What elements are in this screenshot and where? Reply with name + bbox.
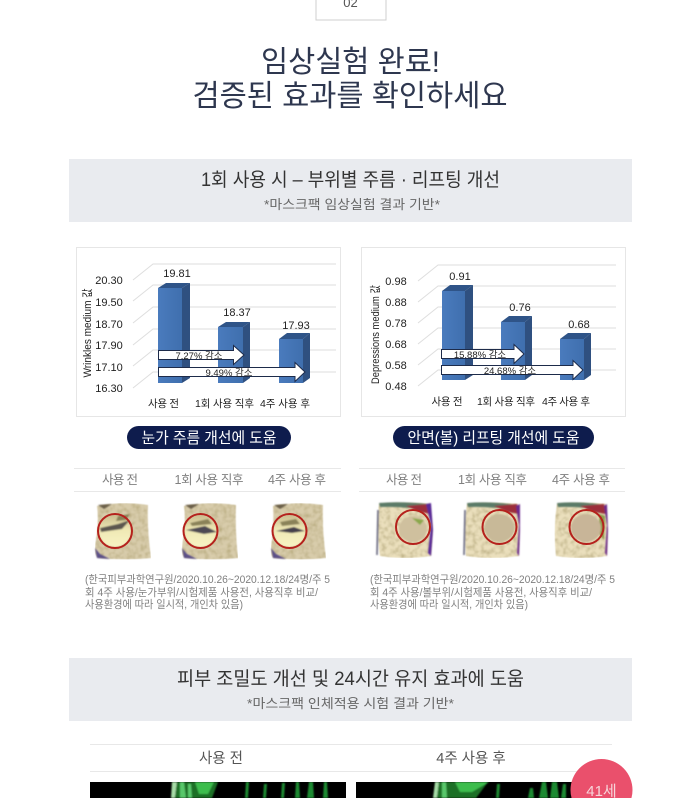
photo comparison: cheek: 1회 사용 직후 xyxy=(458,473,527,487)
comparison header xyxy=(90,744,612,772)
photo comparison: cheek: 4주 사용 후 xyxy=(552,473,610,487)
bar chart: depressions: 사용 전 xyxy=(432,396,462,408)
bar chart: wrinkles: Wrinkles medium 값 xyxy=(81,288,94,378)
panel: skin density heading band: 피부 조밀도 개선 및 24시간 유지 효과에 도움 xyxy=(177,668,524,690)
arrow: 7.27% decrease: 7.27% 감소 xyxy=(175,350,223,362)
bar chart: depressions: 0.76 xyxy=(509,302,531,314)
study note: under-eye: 사용환경에 따라 일시적, 개인차 있음) xyxy=(85,597,243,611)
study note: cheek: 회 4주 사용/볼부위/시험제품 사용전, 사용직후 비교/ xyxy=(370,586,592,599)
photo: cheek after one use xyxy=(464,502,520,558)
photo comparison: under-eye: 4주 사용 후 xyxy=(268,473,326,487)
bar chart: depressions: 4주 사용 후 xyxy=(542,396,590,408)
pill label: under-eye wrinkles: 눈가 주름 개선에 도움 xyxy=(142,429,276,447)
arrow: 24.68% decrease xyxy=(442,360,583,380)
arrow: 15.88% decrease xyxy=(442,344,524,364)
arrow: 9.49% decrease xyxy=(158,362,305,382)
bar chart: depressions: 0.91 xyxy=(449,271,471,283)
bar chart: wrinkles: 18.70 xyxy=(95,319,123,331)
bar chart: wrinkles: 19.81 xyxy=(163,268,191,280)
bar chart: wrinkles xyxy=(76,248,340,416)
pill label: cheek lifting: 안면(볼) 리프팅 개선에 도움 xyxy=(408,429,580,447)
panel: wrinkle and lifting heading band: *마스크팩 임상실험 결과 기반* xyxy=(264,197,440,212)
bar chart: wrinkles: 17.10 xyxy=(95,362,123,374)
study note: under-eye: 회 4주 사용/눈가부위/시험제품 사용전, 사용직후 비교/ xyxy=(85,586,318,599)
bar chart: wrinkles: 1회 사용 직후 xyxy=(195,398,254,410)
bar chart: wrinkles: 16.30 xyxy=(95,383,123,395)
section number badge xyxy=(316,0,386,20)
bar chart: wrinkles: 20.30 xyxy=(95,275,123,287)
panel: wrinkle and lifting heading band: 1회 사용 시 – 부위별 주름 · 리프팅 개선 xyxy=(201,169,500,191)
photo comparison: under-eye: 1회 사용 직후 xyxy=(174,473,244,487)
study note: under-eye xyxy=(85,573,330,611)
panel: skin density heading band xyxy=(69,658,632,721)
bar chart: wrinkles: 사용 전 xyxy=(148,398,179,410)
photo: under-eye after one use xyxy=(182,503,238,560)
bar chart: wrinkles: 18.37 xyxy=(223,307,251,319)
bar chart: wrinkles: 17.90 xyxy=(95,340,123,352)
photo: cheek before xyxy=(377,502,433,558)
bar chart: wrinkles: 17.93 xyxy=(282,320,310,332)
photo comparison: under-eye: 사용 전 xyxy=(102,473,138,487)
comparison header: 4주 사용 후 xyxy=(436,750,506,767)
bar chart: depressions: Depressions medium 값 xyxy=(369,285,382,384)
scan image: after xyxy=(356,782,572,798)
study note: cheek: 사용환경에 따라 일시적, 개인차 있음) xyxy=(370,597,528,611)
panel: skin density heading band: *마스크팩 인체적용 시험 결과 기반* xyxy=(247,696,454,711)
comparison header: 사용 전 xyxy=(199,750,243,767)
arrow: 7.27% decrease xyxy=(158,346,244,364)
study note: under-eye: (한국피부과학연구원/2020.10.26~2020.12.18/24명/주 5 xyxy=(85,573,330,586)
photo: under-eye after four weeks xyxy=(271,503,326,560)
bar chart: depressions: 1회 사용 직후 xyxy=(477,396,535,408)
photo comparison: cheek: 사용 전 xyxy=(386,473,422,487)
bar chart: wrinkles: 19.50 xyxy=(95,297,123,309)
photo: cheek after four weeks xyxy=(555,502,608,558)
scan image: before xyxy=(90,782,346,798)
study note: cheek: (한국피부과학연구원/2020.10.26~2020.12.18/24명/주 5 xyxy=(370,573,615,586)
photo: under-eye before xyxy=(95,503,151,560)
bar chart: depressions: 0.58 xyxy=(385,360,407,372)
arrow: 15.88% decrease: 15.88% 감소 xyxy=(454,349,506,361)
title: 임상실험 완료! xyxy=(261,46,440,79)
pill label: under-eye wrinkles xyxy=(127,426,291,449)
photo comparison: cheek xyxy=(359,468,625,611)
bar chart: depressions: 0.68 xyxy=(385,339,407,351)
age badge xyxy=(570,759,632,798)
panel: wrinkle and lifting heading band xyxy=(69,159,632,222)
bar chart: wrinkles: 4주 사용 후 xyxy=(260,398,310,410)
bar chart: depressions xyxy=(362,248,626,416)
bar chart: depressions: 0.78 xyxy=(385,318,407,330)
bar chart: depressions: 0.88 xyxy=(385,297,407,309)
study note: cheek xyxy=(370,573,615,611)
title xyxy=(192,46,508,113)
arrow: 24.68% decrease: 24.68% 감소 xyxy=(484,365,536,377)
pill label: cheek lifting xyxy=(393,426,594,449)
title: 검증된 효과를 확인하세요 xyxy=(192,80,508,113)
bar chart: depressions: 0.68 xyxy=(568,319,590,331)
arrow: 9.49% decrease: 9.49% 감소 xyxy=(205,367,253,379)
bar chart: depressions: 0.48 xyxy=(385,381,407,393)
photo comparison: under-eye xyxy=(74,468,341,611)
bar chart: depressions: 0.98 xyxy=(385,276,407,288)
